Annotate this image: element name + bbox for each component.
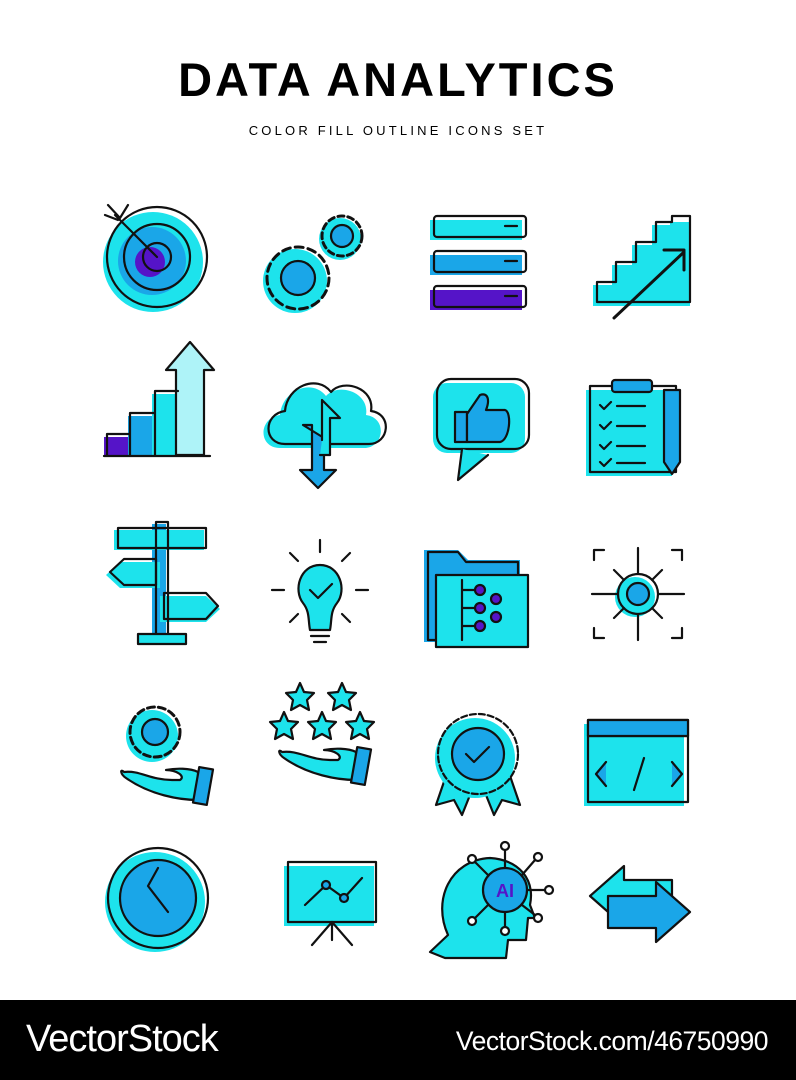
footer: brand: VectorStock <box>26 1018 218 1060</box>
footer bar <box>0 1000 796 1080</box>
icon: AI head <box>430 842 553 958</box>
icon: code window <box>584 720 688 806</box>
icon: target <box>103 205 207 312</box>
icon: hand with stars <box>270 683 374 785</box>
icon: idea bulb <box>272 540 368 642</box>
icon: stairs growth <box>593 216 690 318</box>
icon: stacked bars <box>430 216 526 310</box>
icon: growth bars <box>104 342 214 457</box>
icon: clipboard <box>586 380 680 476</box>
icon: gears <box>263 216 362 313</box>
subtitle: COLOR FILL OUTLINE ICONS SET <box>249 123 547 138</box>
icon: presentation chart <box>284 862 376 945</box>
icon: clock <box>105 848 208 952</box>
icon: signpost <box>106 522 220 644</box>
icon: badge <box>435 714 520 815</box>
footer: url: VectorStock.com/46750990 <box>456 1026 768 1056</box>
icon: hand with gear <box>121 707 213 805</box>
icon: like bubble <box>433 379 529 480</box>
icon: cloud sync <box>264 383 386 488</box>
icon: data folder <box>424 550 528 647</box>
title: DATA ANALYTICS <box>178 53 618 106</box>
icon: transfer arrows <box>590 866 690 942</box>
icon: AI head: AI <box>496 881 514 901</box>
icon: focus target <box>592 548 684 640</box>
